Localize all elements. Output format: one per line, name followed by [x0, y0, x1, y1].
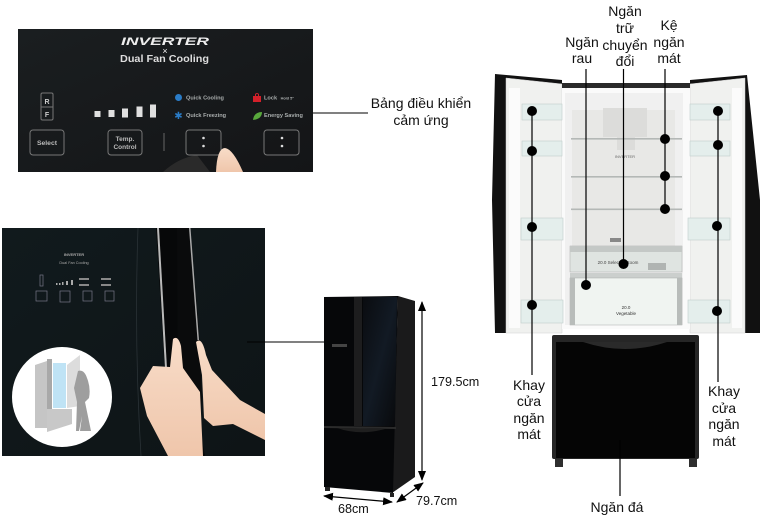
label: conversion drawer	[602, 3, 648, 69]
button: Select: Select	[37, 140, 58, 147]
arrow: height	[421, 302, 423, 480]
conversion drawer: 20.0 Selected Room	[598, 260, 639, 265]
label: left door tray: ngăn	[513, 410, 545, 426]
leader line: freezer	[619, 440, 621, 496]
label: quick freezing: Quick Freezing	[186, 113, 227, 119]
finger shadow	[163, 155, 210, 172]
label: conversion drawer: trữ	[616, 20, 634, 36]
left door exterior	[492, 74, 562, 333]
hand: right	[196, 341, 265, 440]
interior logo: INVERTER	[615, 154, 635, 159]
panel: touch control panel	[18, 29, 313, 172]
leader line and dot: conversion drawer	[618, 69, 628, 269]
label: depth: 79.7cm	[416, 494, 457, 508]
leader lines and dots: shelves	[660, 69, 670, 214]
label: conversion drawer: đổi	[616, 53, 634, 69]
label: conversion drawer: chuyển	[602, 37, 648, 53]
label: control panel	[371, 95, 471, 128]
label: quick cooling: Quick Cooling	[186, 96, 224, 102]
right door inner strip	[732, 88, 742, 328]
door handles	[156, 228, 205, 456]
label: vegetable drawer: rau	[572, 50, 592, 66]
label: right door tray: mát	[712, 433, 736, 449]
button: right dots	[264, 130, 299, 155]
R/F switch	[41, 93, 53, 120]
vegetable drawer: Vegetable	[616, 311, 637, 316]
button: Select	[30, 130, 64, 155]
logo: Dual Fan Cooling: Dual Fan Cooling	[120, 53, 209, 65]
door edge line	[137, 228, 141, 456]
conversion drawer	[570, 246, 682, 272]
label: lock: Lock Hold 5"	[264, 96, 294, 102]
cabinet interior	[562, 88, 690, 329]
label: vegetable drawer	[565, 34, 599, 66]
label plate	[610, 238, 621, 242]
vegetable drawer: 20.0	[622, 305, 631, 310]
label: height: 179.5cm	[431, 375, 479, 389]
right door interior	[690, 78, 745, 333]
finger	[216, 148, 243, 172]
logo: times sign: ×	[162, 46, 168, 56]
button: Temp. Control: Control	[113, 144, 137, 151]
label: left door tray: cửa	[517, 393, 541, 409]
arrow: width	[324, 496, 392, 502]
R/F switch: F	[45, 112, 50, 119]
cabinet top	[562, 83, 690, 88]
vegetable drawer	[570, 273, 682, 325]
label: energy saving: Energy Saving	[264, 113, 303, 119]
button: Temp. Control: Temp.	[116, 136, 135, 143]
left door interior	[506, 78, 562, 333]
label: vegetable drawer: Ngăn	[565, 34, 599, 50]
icon: quick freezing: ✱	[174, 111, 183, 122]
mini status labels	[79, 278, 111, 286]
label: shelves: ngăn	[653, 34, 685, 50]
R/F switch: R	[44, 99, 50, 106]
label: right door tray	[708, 383, 740, 449]
mini logo: INVERTER	[64, 252, 84, 257]
label: right door tray: ngăn	[708, 416, 740, 432]
illustration: open fridge	[492, 74, 760, 333]
button: left dots	[186, 130, 221, 155]
label: control panel: Bảng điều khiển	[371, 95, 471, 111]
label: control panel: cảm ứng	[393, 112, 449, 128]
leader lines and dots: right door trays	[712, 106, 723, 382]
fan cover	[603, 108, 647, 150]
left door inner strip	[509, 88, 520, 328]
arrow: depth	[397, 483, 423, 502]
label: left door tray: mát	[517, 426, 541, 442]
shelves	[571, 138, 682, 210]
panel: door handle photo	[2, 228, 265, 456]
leader line and dot: vegetable drawer	[581, 69, 591, 290]
label: left door tray: Khay	[513, 377, 545, 393]
icon: quick cooling	[175, 94, 182, 101]
label: conversion drawer: Ngăn	[608, 3, 642, 19]
illustration: closed fridge	[324, 296, 415, 497]
label: shelves	[653, 17, 685, 66]
right door exterior	[690, 75, 760, 333]
leader lines and dots: left door trays	[527, 106, 537, 375]
door bins	[521, 104, 730, 323]
temperature level bars	[94, 104, 156, 118]
icon: lock	[253, 93, 261, 102]
mini level bars	[56, 280, 73, 285]
label: freezer: Ngăn đá	[591, 499, 644, 515]
label: shelves: Kệ	[660, 17, 678, 33]
icon: person opening fridge	[12, 347, 112, 447]
leader line: control panel	[313, 112, 368, 114]
mini control panel	[36, 275, 114, 302]
icon: leaf	[253, 112, 262, 120]
mini logo line two: Dual Fan Cooling	[59, 261, 89, 265]
button: Temp. Control	[108, 130, 142, 155]
illustration: freezer drawer	[552, 335, 699, 467]
label: right door tray: cửa	[712, 400, 736, 416]
label: left door tray	[513, 377, 545, 442]
leader line: handle	[247, 341, 324, 343]
label: width: 68cm	[338, 502, 369, 516]
hand: left	[140, 338, 203, 456]
logo: Inverter: INVERTER	[121, 36, 209, 48]
label: shelves: mát	[657, 50, 681, 66]
label: right door tray: Khay	[708, 383, 740, 399]
